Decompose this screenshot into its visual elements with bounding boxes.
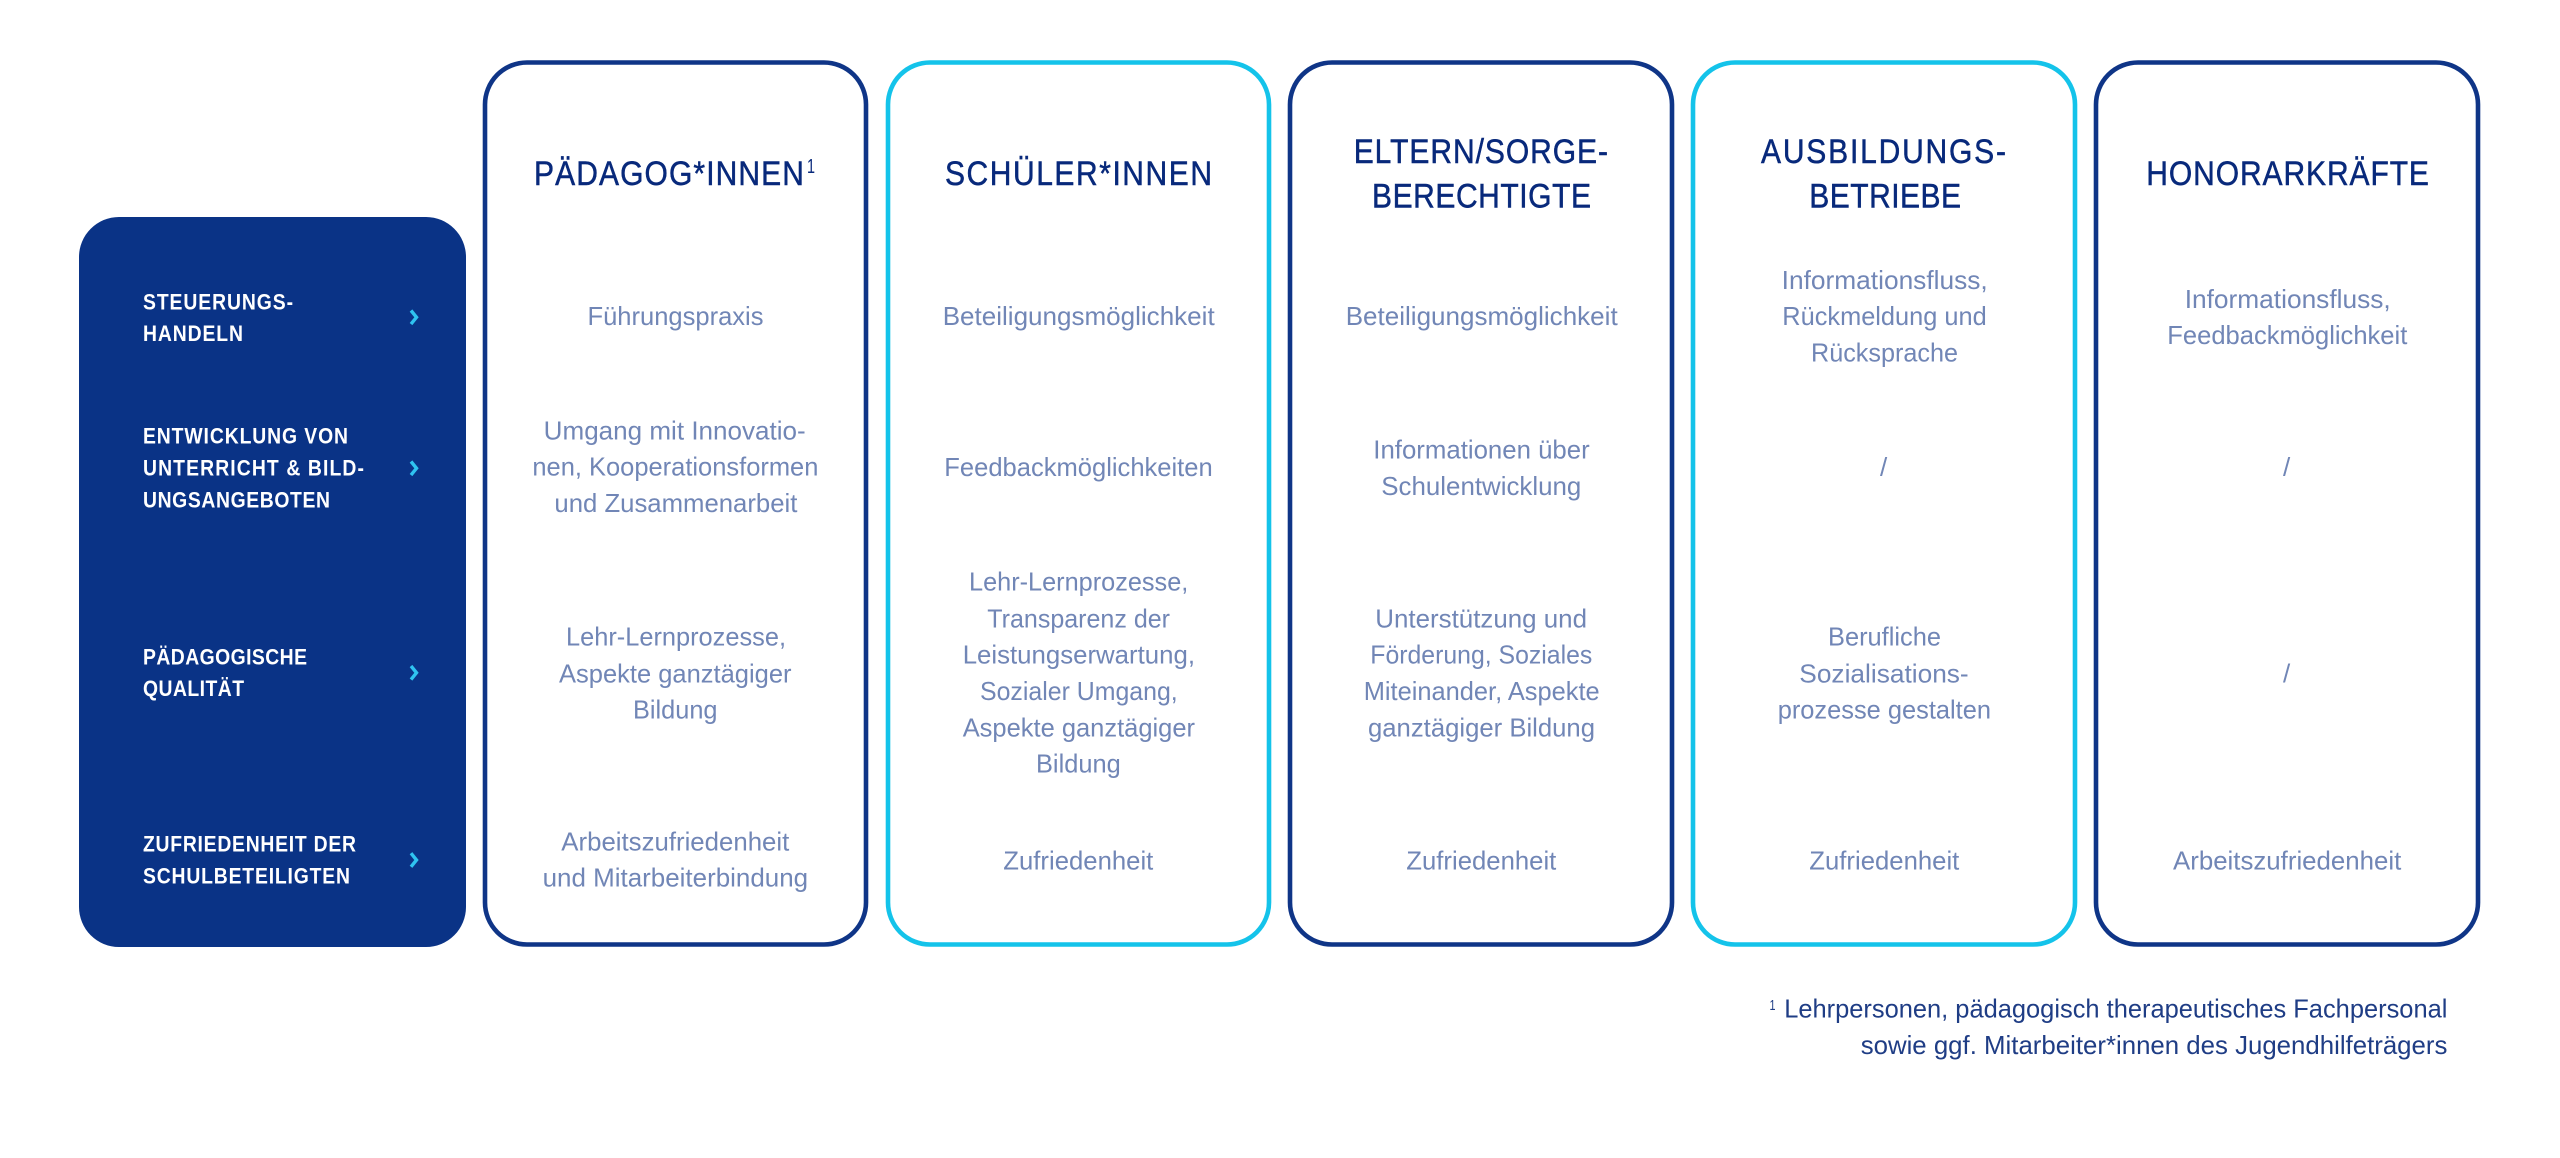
row label: Steuerungshandeln: HANDELN — [143, 322, 243, 346]
icon: chevron row 2 — [411, 462, 416, 475]
row label: Pädagogische Qualität: QUALITÄT — [143, 677, 244, 701]
text: Umgang mit Innovationen: nen, Kooperationsformen — [532, 452, 818, 482]
text: Lehr-Lernprozesse und Transparenz: Sozialer Umgang, — [980, 676, 1178, 706]
row label: Entwicklung von Unterricht und Bildungsangeboten: UNGSANGEBOTEN — [143, 489, 330, 513]
heading: Eltern/Sorgeberechtigte: ELTERN/SORGE- — [1354, 132, 1608, 170]
text: Lehr-Lernprozesse und Transparenz: Bildung — [1036, 749, 1121, 779]
panel: Schüler*innen — [888, 62, 1269, 944]
text: Informationen über Schulentwicklung: Schulentwicklung — [1381, 471, 1581, 501]
heading: Schüler*innen: SCHÜLER*INNEN — [945, 154, 1212, 192]
text: Berufliche Sozialisationsprozesse: prozesse gestalten — [1778, 695, 1991, 725]
panel: Ausbildungsbetriebe — [1693, 62, 2075, 944]
text: Informationsfluss, Feedbackmöglichkeit: Feedbackmöglichkeit — [2167, 320, 2408, 350]
text: Unterstützung und Förderung: ganztägiger Bildung — [1368, 712, 1595, 742]
footnote: 1 — [1770, 997, 1776, 1014]
heading: Eltern/Sorgeberechtigte — [1354, 132, 1608, 215]
row label: Entwicklung von Unterricht und Bildungsangeboten: ENTWICKLUNG VON — [143, 424, 348, 449]
text: Zufriedenheit: Zufriedenheit — [1406, 845, 1557, 875]
text: Arbeitszufriedenheit und Mitarbeiterbindung: und Mitarbeiterbindung — [543, 863, 808, 893]
text: Arbeitszufriedenheit und Mitarbeiterbindung: Arbeitszufriedenheit — [561, 826, 790, 856]
panel: row labels — [79, 217, 466, 947]
heading: Honorarkräfte: HONORARKRÄFTE — [2146, 154, 2429, 192]
row label: Zufriedenheit der Schulbeteiligten — [143, 833, 356, 889]
footnote: Lehrpersonen, pädagogisch therapeutisches Fachpersonal — [1784, 993, 2447, 1023]
text: Informationsfluss, Feedbackmöglichkeit — [2167, 284, 2408, 350]
heading: Pädagog*innen: 1 — [807, 156, 815, 178]
text: Umgang mit Innovationen — [532, 415, 818, 518]
text: Informationsfluss, Rückmeldung: Informationsfluss, — [1782, 265, 1988, 295]
text: Informationsfluss, Rückmeldung: Rückmeldung und — [1782, 301, 1987, 331]
row label: Zufriedenheit der Schulbeteiligten: SCHULBETEILIGTEN — [143, 864, 350, 889]
heading: Pädagog*innen: PÄDAGOG*INNEN — [534, 154, 804, 192]
text: Unterstützung und Förderung: Förderung, Soziales — [1370, 640, 1592, 670]
panel: Honorarkräfte — [2096, 62, 2478, 944]
text: Berufliche Sozialisationsprozesse — [1778, 622, 1991, 725]
text: Beteiligungsmöglichkeit: Beteiligungsmöglichkeit — [1346, 301, 1618, 331]
text: Umgang mit Innovationen: und Zusammenarbeit — [554, 488, 798, 518]
panel: Pädagog*innen — [485, 62, 866, 944]
footnote: sowie ggf. Mitarbeiter*innen des Jugendhilfeträgers — [1861, 1030, 2447, 1060]
text: slash row 2: / — [1880, 452, 1888, 482]
text: Lehr-Lernprozesse — [559, 622, 792, 725]
text: Lehr-Lernprozesse: Bildung — [633, 695, 718, 725]
text: Lehr-Lernprozesse und Transparenz: Lehr-Lernprozesse, — [969, 567, 1188, 597]
row label: Steuerungshandeln: STEUERUNGS- — [143, 290, 293, 315]
text: Unterstützung und Förderung — [1364, 603, 1600, 742]
heading: Eltern/Sorgeberechtigte: BERECHTIGTE — [1372, 176, 1591, 215]
text: Lehr-Lernprozesse und Transparenz: Leistungserwartung, — [963, 640, 1195, 670]
text: Zufriedenheit: Zufriedenheit — [1809, 845, 1960, 875]
text: Informationen über Schulentwicklung — [1373, 434, 1590, 501]
heading: Ausbildungsbetriebe — [1761, 132, 2006, 215]
row label: Zufriedenheit der Schulbeteiligten: ZUFRIEDENHEIT DER — [143, 833, 356, 857]
row label: Entwicklung von Unterricht und Bildungsangeboten: UNTERRICHT & BILD- — [143, 457, 364, 481]
text: slash row 3: / — [2283, 658, 2291, 688]
text: slash row 2: / — [2283, 452, 2291, 482]
text: Führungspraxis: Führungspraxis — [588, 301, 764, 331]
text: Lehr-Lernprozesse und Transparenz: Aspekte ganztägiger — [963, 712, 1195, 742]
heading: Ausbildungsbetriebe: BETRIEBE — [1809, 176, 1961, 215]
text: Beteiligungsmöglichkeit: Beteiligungsmöglichkeit — [943, 301, 1215, 331]
heading: Ausbildungsbetriebe: AUSBILDUNGS- — [1761, 132, 2006, 170]
row label: Pädagogische Qualität: PÄDAGOGISCHE — [143, 645, 307, 670]
text: Informationen über Schulentwicklung: Informationen über — [1373, 434, 1590, 464]
text: Umgang mit Innovationen: Umgang mit Innovatio- — [544, 415, 806, 445]
text: Zufriedenheit: Zufriedenheit — [1003, 845, 1154, 875]
footnote — [1770, 993, 2447, 1060]
text: Informationsfluss, Rückmeldung: Rücksprache — [1811, 337, 1958, 367]
text: Feedbackmöglichkeiten: Feedbackmöglichkeiten — [944, 452, 1213, 482]
text: Lehr-Lernprozesse und Transparenz: Transparenz der — [987, 603, 1170, 633]
text: Berufliche Sozialisationsprozesse: Berufliche — [1828, 622, 1941, 652]
text: Arbeitszufriedenheit und Mitarbeiterbindung — [543, 826, 808, 893]
text: Informationsfluss, Feedbackmöglichkeit: Informationsfluss, — [2185, 284, 2391, 314]
text: Lehr-Lernprozesse: Aspekte ganztägiger — [559, 658, 792, 688]
panel: Eltern/Sorgeberechtigte — [1290, 62, 1672, 944]
text: Lehr-Lernprozesse: Lehr-Lernprozesse, — [566, 622, 786, 652]
row label: Entwicklung von Unterricht und Bildungsangeboten — [143, 424, 364, 513]
icon: chevron row 4 — [411, 853, 416, 867]
row label: Steuerungshandeln — [143, 290, 293, 346]
icon: chevron row 1 — [411, 310, 416, 324]
text: Unterstützung und Förderung: Miteinander, Aspekte — [1364, 676, 1600, 706]
row label: Pädagogische Qualität — [143, 645, 307, 701]
icon: chevron row 3 — [411, 666, 416, 680]
text: Berufliche Sozialisationsprozesse: Sozialisations- — [1799, 658, 1969, 688]
text: Lehr-Lernprozesse und Transparenz — [963, 567, 1195, 779]
text: Informationsfluss, Rückmeldung — [1782, 265, 1988, 367]
text: Unterstützung und Förderung: Unterstützung und — [1375, 603, 1587, 633]
text: Arbeitszufriedenheit: Arbeitszufriedenheit — [2173, 845, 2402, 875]
